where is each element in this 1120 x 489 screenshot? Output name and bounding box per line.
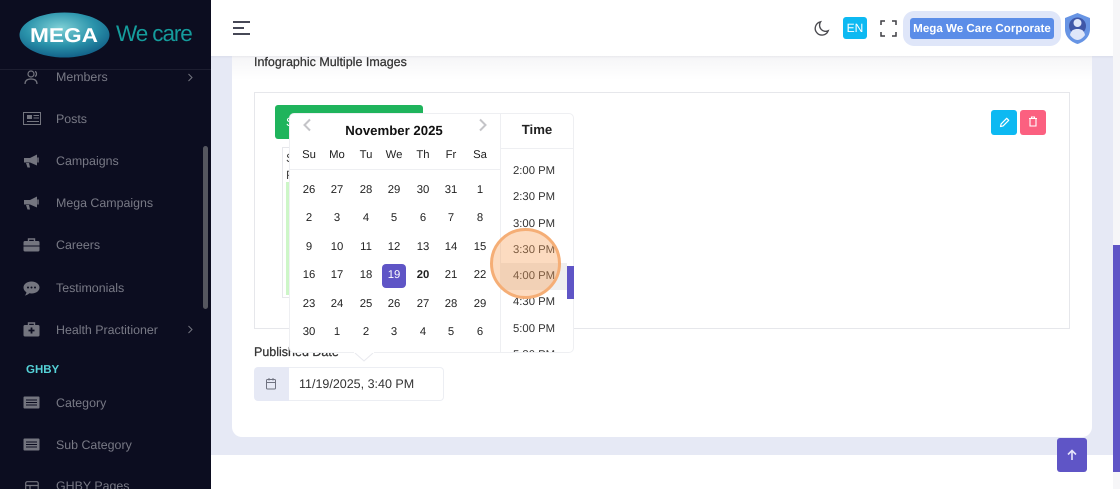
time list: 5:00 PM: [513, 323, 555, 335]
icon: moon: [814, 20, 830, 36]
highlight circle: [490, 228, 561, 299]
calendar grid: 29: [388, 184, 400, 196]
icon: category: [24, 396, 40, 408]
time title: Time: [522, 122, 552, 137]
calendar grid: 26: [388, 298, 400, 310]
icon: sub category: [24, 438, 40, 450]
user name label: [910, 18, 1054, 39]
nav: members: Members: [56, 70, 108, 84]
calendar grid: 15: [474, 241, 486, 253]
language badge: [843, 17, 867, 39]
time list: 4:00 PM: [513, 270, 555, 282]
heading: infographic multiple images: Infographic Multiple Images: [254, 55, 407, 69]
nav: sub category: Sub Category: [56, 438, 132, 452]
calendar grid: 3: [391, 326, 397, 338]
calendar grid: 28: [445, 298, 457, 310]
top header bar: [211, 0, 1113, 56]
calendar grid: 20: [417, 269, 429, 281]
nav: health practitioner: Health Practitioner: [56, 323, 158, 337]
calendar grid: 27: [331, 184, 343, 196]
calendar grid: 30: [303, 326, 315, 338]
nav: posts: Posts: [56, 112, 87, 126]
hovered time row: [500, 263, 567, 290]
calendar grid: 24: [331, 298, 343, 310]
calendar grid: We: [386, 149, 402, 161]
logo wordmark: We care: [116, 21, 192, 46]
calendar grid: 25: [360, 298, 372, 310]
nav: mega campaigns: Mega Campaigns: [56, 196, 153, 210]
calendar grid: 30: [417, 184, 429, 196]
calendar grid: 21: [445, 269, 457, 281]
icon: user shield avatar: [1065, 13, 1090, 44]
page scrollbar thumb: [1113, 245, 1120, 472]
calendar grid: 6: [477, 326, 483, 338]
calendar grid: 22: [474, 269, 486, 281]
icon button: edit: [991, 110, 1017, 135]
user name label: Mega We Care Corporate: [913, 22, 1051, 35]
time list: 2:00 PM: [513, 165, 555, 177]
calendar grid: 11: [360, 241, 372, 253]
calendar grid: 19: [388, 269, 400, 281]
calendar grid: 29: [474, 298, 486, 310]
calendar addon: [254, 367, 289, 401]
calendar grid: 23: [303, 298, 315, 310]
calendar grid: 8: [477, 212, 483, 224]
weekday header line: [290, 169, 500, 170]
calendar grid: [302, 149, 487, 338]
calendar grid: 31: [445, 184, 457, 196]
icon: GHBY pages: [25, 481, 39, 489]
image preview frame: P: [286, 168, 294, 182]
icon: campaigns: [24, 154, 39, 168]
content background: [211, 0, 1113, 455]
calendar grid: 18: [360, 269, 372, 281]
back to top button: [1057, 438, 1087, 472]
calendar grid: Tu: [360, 149, 372, 161]
nav: category: Category: [56, 396, 106, 410]
nav: careers: Careers: [56, 238, 100, 252]
icon: posts: [23, 112, 41, 125]
time scrollbar thumb: [567, 266, 574, 299]
image preview frame: [282, 147, 342, 298]
icon: mega campaigns: [24, 196, 39, 210]
language badge: EN: [847, 21, 863, 35]
label: published date: Published Date: [254, 345, 339, 359]
calendar grid: 2: [306, 212, 312, 224]
calendar grid: 2: [363, 326, 369, 338]
calendar grid: Fr: [446, 149, 456, 161]
panel: main card: [232, 40, 1092, 437]
icon: testimonials: [24, 282, 40, 296]
time list: [513, 165, 555, 352]
green select button: [275, 105, 423, 139]
time list: 3:30 PM: [513, 244, 555, 256]
date text field: [289, 367, 444, 401]
calendar grid: 12: [388, 241, 400, 253]
icon: careers: [24, 238, 40, 252]
calendar grid: 27: [417, 298, 429, 310]
previous month arrow: [303, 118, 311, 132]
chevron: members: [188, 74, 192, 82]
icon button: delete: [1020, 110, 1046, 135]
nav: testimonials: Testimonials: [56, 281, 124, 295]
calendar grid: 4: [420, 326, 426, 338]
calendar grid: Sa: [473, 149, 487, 161]
chevron: health practitioner: [188, 326, 192, 334]
calendar grid: Mo: [329, 149, 345, 161]
calendar grid: 1: [477, 184, 483, 196]
calendar grid: 6: [420, 212, 426, 224]
time list: 3:00 PM: [513, 218, 555, 230]
time list: 2:30 PM: [513, 191, 555, 203]
date text field: 11/19/2025, 3:40 PM: [299, 377, 414, 391]
calendar grid: 26: [303, 184, 315, 196]
green preview strip: [286, 182, 290, 295]
time header line: [500, 148, 575, 149]
calendar grid: 7: [448, 212, 454, 224]
next month arrow: [479, 118, 487, 132]
calendar grid: Su: [302, 149, 316, 161]
popup pointer: [354, 352, 374, 362]
icon: menu: [233, 21, 250, 35]
calendar grid: 1: [334, 326, 340, 338]
page scrollbar track: [1113, 0, 1120, 489]
input: published date: [254, 367, 444, 401]
calendar grid: 4: [363, 212, 369, 224]
calendar grid: 9: [306, 241, 312, 253]
calendar grid: 16: [303, 269, 315, 281]
calendar grid: 14: [445, 241, 457, 253]
icon: fullscreen: [880, 20, 897, 37]
calendar grid: 13: [417, 241, 429, 253]
top shadow: [232, 56, 1092, 80]
calendar grid: 5: [391, 212, 397, 224]
green select button: S: [286, 115, 294, 129]
logo oval: MEGA: [30, 25, 98, 47]
sidebar: [0, 0, 211, 489]
calendar grid: Th: [416, 149, 430, 161]
time list: 4:30 PM: [513, 296, 555, 308]
date time picker popup: [289, 113, 574, 353]
nav: campaigns: Campaigns: [56, 154, 119, 168]
calendar grid: 28: [360, 184, 372, 196]
image preview frame: S: [286, 151, 294, 165]
icon: health practitioner: [24, 322, 40, 336]
user name pill: [903, 11, 1061, 46]
calendar grid: 17: [331, 269, 343, 281]
logo oval: [20, 12, 110, 58]
section label: GHBY: GHBY: [26, 364, 59, 376]
calendar grid: 3: [334, 212, 340, 224]
icon: members: [24, 70, 38, 84]
calendar grid: 10: [331, 241, 343, 253]
panel: image upload box: [254, 92, 1070, 329]
month title: November 2025: [345, 123, 443, 138]
time column divider: [500, 114, 501, 354]
sidebar logo header: [0, 0, 211, 70]
calendar grid: 5: [448, 326, 454, 338]
sidebar scrollbar: [203, 146, 208, 309]
